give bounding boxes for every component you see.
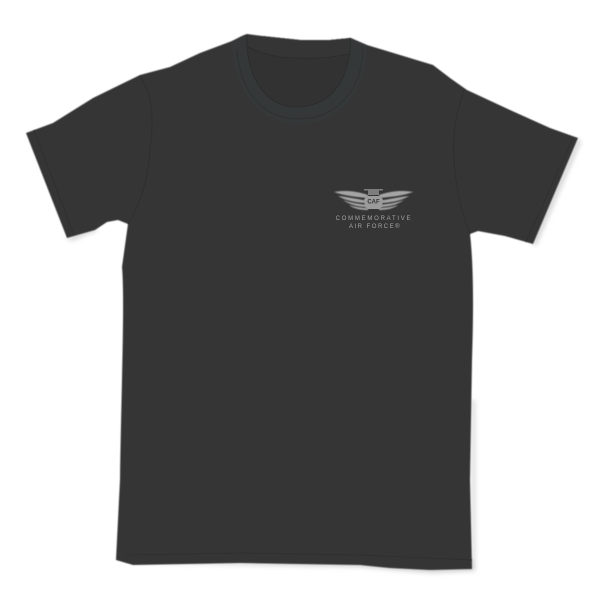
icon: left wing bbox=[334, 191, 368, 210]
drop shadow bbox=[66, 138, 581, 573]
logo text line two: AIR FORCE® bbox=[349, 223, 401, 230]
garment seams and folds bbox=[34, 35, 572, 560]
inside back of neck bbox=[247, 35, 350, 107]
chest logo: Commemorative Air Force bbox=[334, 189, 413, 230]
back collar band bbox=[247, 35, 350, 58]
icon: crest top bbox=[364, 189, 383, 195]
logo text line one: COMMEMORATIVE bbox=[336, 216, 412, 222]
icon: right wing bbox=[379, 191, 413, 210]
icon: central shield bbox=[364, 196, 383, 209]
logo initials: CAF bbox=[367, 200, 380, 206]
front collar rib bbox=[232, 35, 367, 124]
